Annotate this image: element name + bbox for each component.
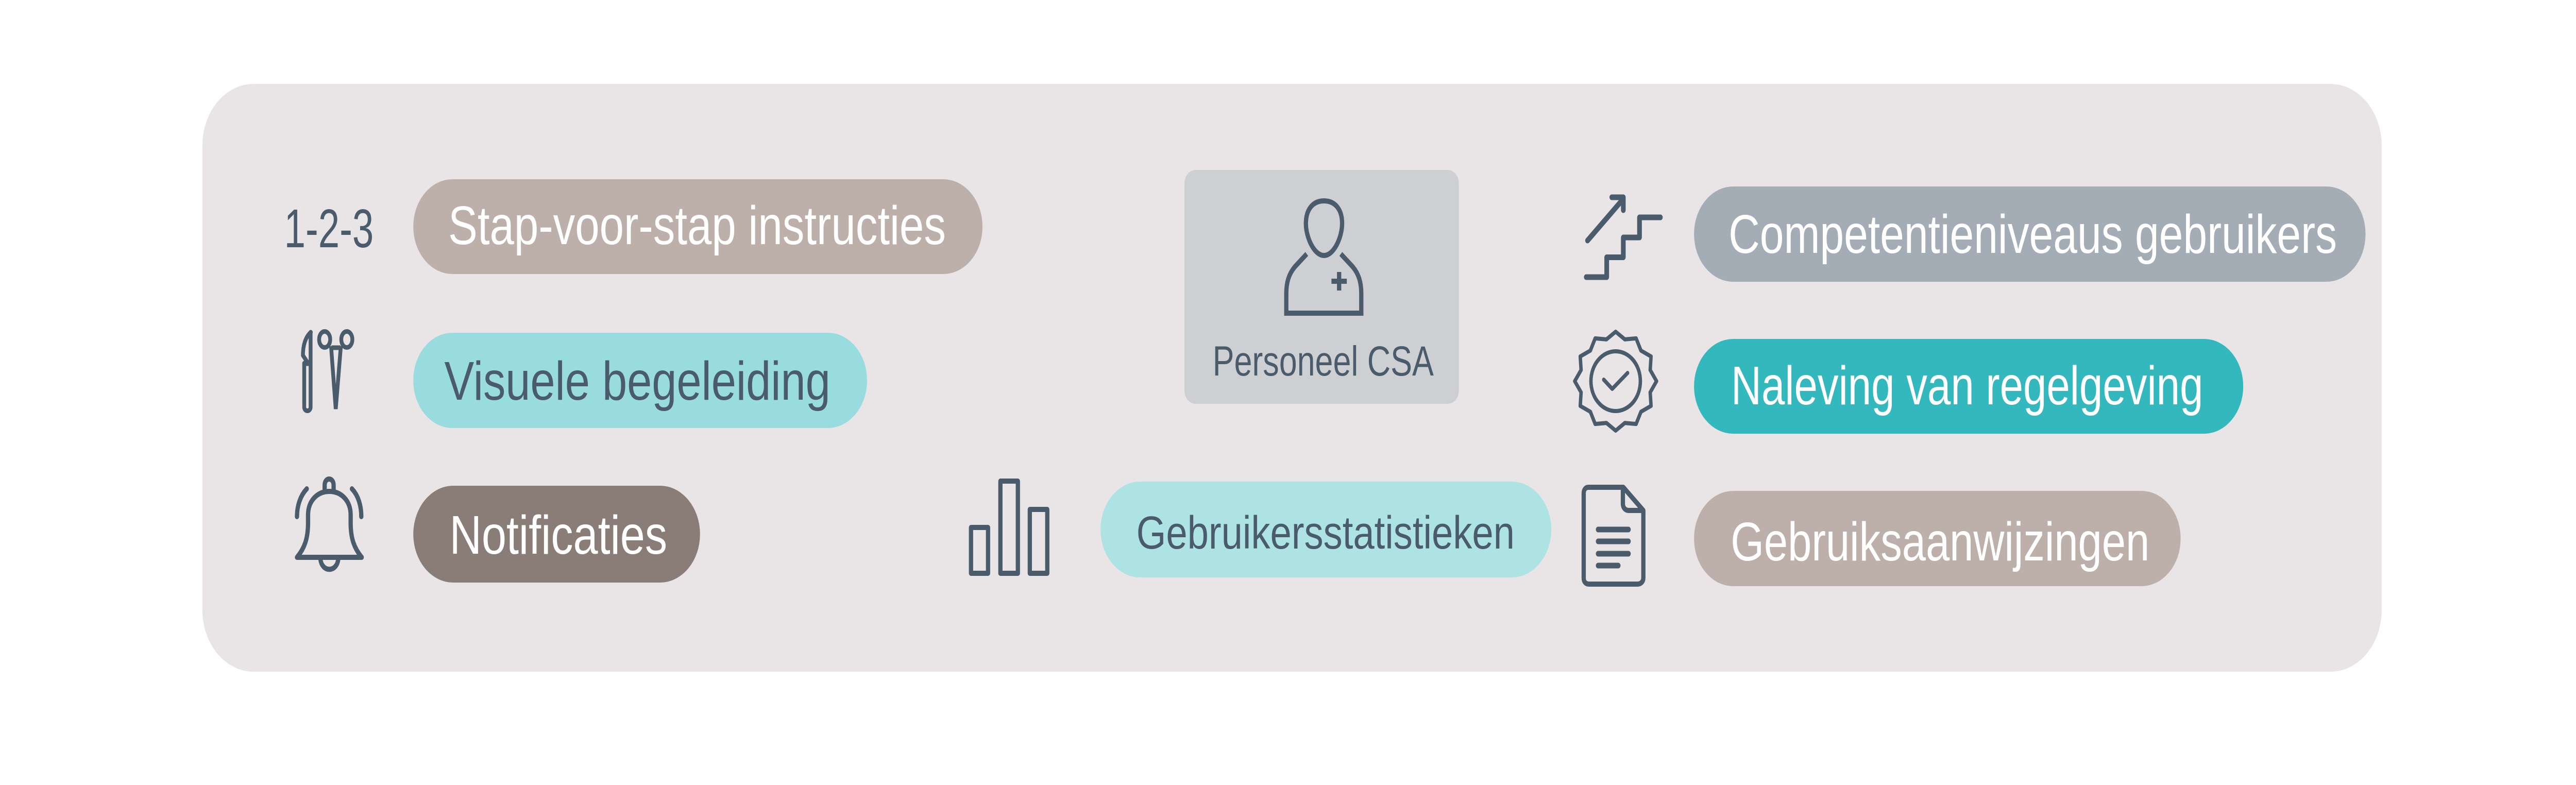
pill: Notificaties: Notificaties xyxy=(449,504,667,566)
pill: Competentieniveaus gebruikers: Competentieniveaus gebruikers xyxy=(1728,203,2337,265)
card: Personeel CSA xyxy=(1184,170,1459,404)
pill: Naleving van regelgeving: Naleving van regelgeving xyxy=(1731,355,2203,416)
pill: Competentieniveaus gebruikers xyxy=(1694,186,2365,282)
pill: Notificaties xyxy=(413,486,700,583)
panel: background xyxy=(202,84,2382,672)
icon: stairs with arrow xyxy=(1586,197,1660,277)
pill: Gebruikersstatistieken: Gebruikersstatistieken xyxy=(1137,507,1515,559)
icon: medical staff person xyxy=(1286,201,1361,313)
icon: compliance badge xyxy=(1575,332,1656,431)
pill: Naleving van regelgeving xyxy=(1694,339,2243,434)
card: Personeel CSA: Personeel CSA xyxy=(1213,337,1434,384)
pill: Visuele begeleiding xyxy=(413,333,867,428)
icon: bar chart xyxy=(971,481,1047,573)
icon: bell xyxy=(297,479,362,569)
pill: Stap-voor-stap instructies: Stap-voor-stap instructies xyxy=(448,195,946,256)
pill: Gebruiksaanwijzingen: Gebruiksaanwijzingen xyxy=(1731,511,2149,572)
pill: Gebruikersstatistieken xyxy=(1100,482,1551,577)
pill: Visuele begeleiding: Visuele begeleiding xyxy=(445,350,831,412)
icon: document xyxy=(1584,487,1643,584)
pill: Stap-voor-stap instructies xyxy=(413,179,982,274)
icon: scalpel and scissors xyxy=(303,332,352,411)
pill: Gebruiksaanwijzingen xyxy=(1694,491,2181,586)
icon: 1-2-3: 1-2-3 xyxy=(284,198,374,259)
